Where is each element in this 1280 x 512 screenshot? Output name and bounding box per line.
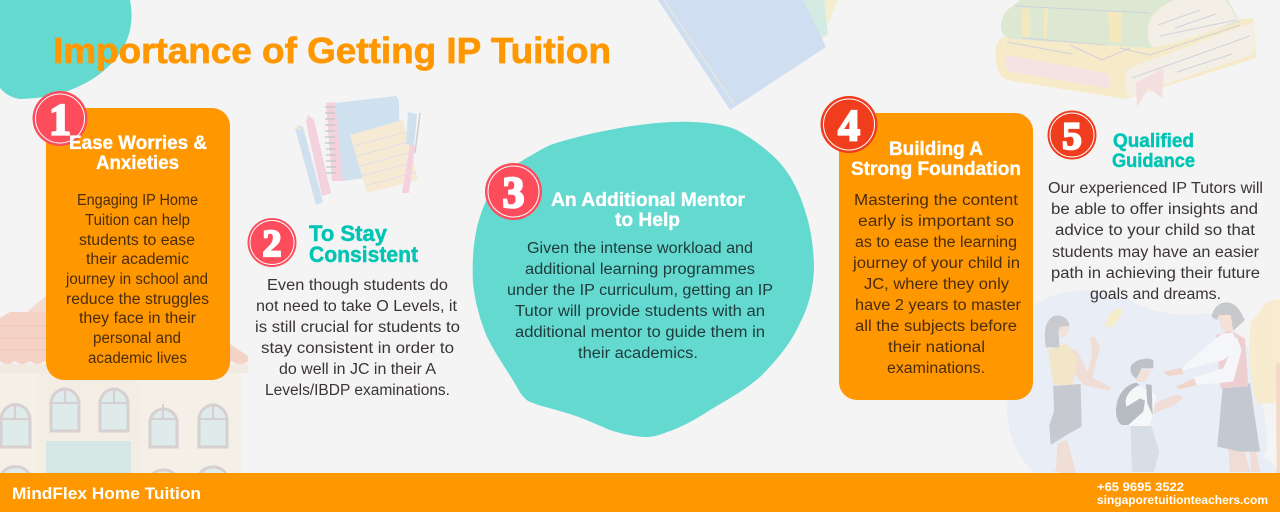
body text: not need to take O Levels, it <box>256 298 458 315</box>
boy <box>1116 359 1183 472</box>
body text: students may have an easier <box>1052 244 1259 261</box>
card background <box>839 113 1033 400</box>
illustration: stacked books <box>995 0 1256 108</box>
body text: early is important so <box>858 213 1014 230</box>
number badge 2 <box>248 218 296 267</box>
body text: have 2 years to master <box>855 297 1021 314</box>
body text: Tuition can help <box>85 212 190 229</box>
heading <box>851 138 1021 180</box>
number badge 1: 1 <box>49 95 71 144</box>
footer brand name: MindFlex Home Tuition <box>12 484 201 503</box>
body text <box>65 192 209 367</box>
body text: under the IP curriculum, getting an IP <box>507 282 773 299</box>
footer bar <box>0 473 1280 512</box>
body text: personal and <box>93 330 181 347</box>
decorative teal blob top left <box>0 0 132 99</box>
heading: Guidance <box>1112 151 1195 172</box>
body text: be able to offer insights and <box>1051 201 1258 218</box>
teal blob background <box>473 122 814 437</box>
heading: Strong Foundation <box>851 158 1021 180</box>
number badge 4: 4 <box>838 101 860 150</box>
body text: advice to your child so that <box>1055 222 1256 239</box>
background shape <box>1007 290 1280 473</box>
body text <box>1048 180 1263 303</box>
body text: Mastering the content <box>854 192 1019 209</box>
number badge 5 <box>1048 110 1096 160</box>
heading: Building A <box>889 138 983 160</box>
heading <box>309 221 419 267</box>
body text: Levels/IBDP examinations. <box>265 382 450 399</box>
body text: all the subjects before <box>855 318 1017 335</box>
body text: Our experienced IP Tutors will <box>1048 180 1263 197</box>
heading: To Stay <box>309 221 388 246</box>
body text: path in achieving their future <box>1051 265 1260 282</box>
heading: Ease Worries & <box>69 132 207 154</box>
body text: reduce the struggles <box>66 291 209 308</box>
body text: academic lives <box>88 350 187 367</box>
heading: Anxieties <box>96 152 179 174</box>
body text: JC, where they only <box>864 276 1009 293</box>
heading: Consistent <box>309 242 419 267</box>
number badge 3: 3 <box>502 168 524 217</box>
heading: Qualified <box>1113 131 1194 152</box>
footer contact details: +65 9695 3522 <box>1097 480 1184 494</box>
body text: do well in JC in their A <box>279 361 437 378</box>
body text: their academics. <box>578 345 698 362</box>
panel 3: additional mentor <box>473 122 814 437</box>
illustration: blue book at top <box>658 0 838 110</box>
body text: students to ease <box>79 232 195 249</box>
body text <box>255 277 460 399</box>
heading <box>551 189 745 231</box>
panel 2: to stay consistent <box>248 218 460 399</box>
body text: Even though students do <box>267 277 448 294</box>
number badge 3 <box>485 163 542 220</box>
panel 1: ease worries <box>32 91 230 380</box>
illustration: school building <box>0 296 248 480</box>
heading: An Additional Mentor <box>551 189 745 211</box>
title: Importance of Getting IP Tuition <box>53 30 611 71</box>
body text: stay consistent in order to <box>261 340 454 357</box>
body text: additional learning programmes <box>525 261 755 278</box>
body text: journey of your child in <box>852 255 1020 272</box>
tree <box>1249 299 1280 403</box>
body text: examinations. <box>887 360 985 377</box>
body text: additional mentor to guide them in <box>515 324 765 341</box>
body text: Tutor will provide students with an <box>515 303 765 320</box>
number badge 5: 5 <box>1062 115 1082 158</box>
heading <box>1112 131 1195 172</box>
body text: their national <box>888 339 985 356</box>
heading: to Help <box>615 209 680 231</box>
footer contact details: singaporetuitionteachers.com <box>1097 493 1268 507</box>
body text: Given the intense workload and <box>527 240 753 257</box>
card background <box>46 108 230 380</box>
right woman <box>1164 302 1260 472</box>
leaf <box>1105 308 1122 327</box>
number badge 2: 2 <box>262 223 282 265</box>
body text <box>852 192 1021 377</box>
panel 5: qualified guidance <box>1048 110 1263 303</box>
body text <box>507 240 773 362</box>
tree trunk <box>1276 363 1280 473</box>
heading <box>69 132 207 174</box>
body text: Engaging IP Home <box>77 192 198 209</box>
illustration: notebook and pencils <box>295 96 420 205</box>
footer contact details <box>1097 480 1268 507</box>
body text: journey in school and <box>65 271 208 288</box>
body text: they face in their <box>79 310 196 327</box>
number badge 1 <box>32 91 88 146</box>
body text: their academic <box>86 251 189 268</box>
panel 4: strong foundation <box>820 96 1033 400</box>
body text: is still crucial for students to <box>255 319 460 336</box>
number badge 4 <box>820 96 878 153</box>
body text: goals and dreams. <box>1090 286 1221 303</box>
illustration: parent, child and teacher <box>1007 290 1280 473</box>
left woman <box>1045 316 1112 473</box>
body text: as to ease the learning <box>855 234 1017 251</box>
